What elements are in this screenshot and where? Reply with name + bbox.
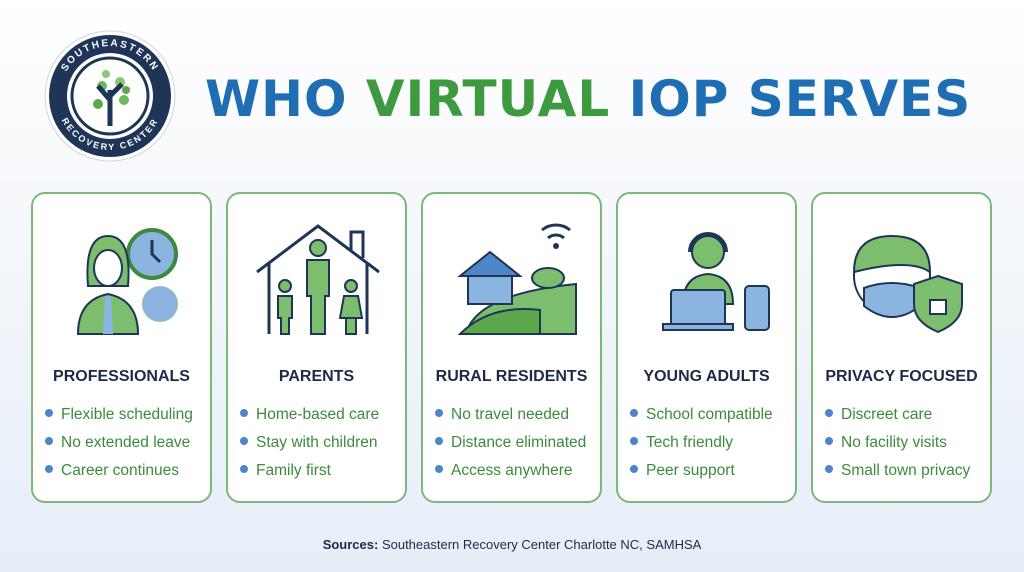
panel: parents [226, 192, 407, 503]
bullets [435, 406, 586, 479]
heading: PARENTS [279, 368, 354, 385]
bullets: Flexible scheduling [61, 406, 193, 423]
heading: PRIVACY FOCUSED [825, 368, 978, 385]
bullets: No facility visits [841, 434, 947, 451]
bullets: School compatible [646, 406, 773, 423]
bullets [825, 406, 970, 479]
bullets [45, 406, 193, 479]
panel: privacy [811, 192, 992, 503]
icon: professional [77, 228, 178, 335]
sources: Sources: Southeastern Recovery Center Charlotte NC, SAMHSA [323, 537, 701, 552]
panel: rural [421, 192, 602, 503]
bullets: Peer support [646, 462, 735, 479]
panel: young adults [616, 192, 797, 503]
bullets [240, 406, 379, 479]
heading: RURAL RESIDENTS [436, 368, 587, 385]
bullets: Access anywhere [451, 462, 572, 479]
bullets: Stay with children [256, 434, 377, 451]
panel: professionals [31, 192, 212, 503]
icon: rural house [457, 224, 577, 335]
icon: masked face shield [853, 235, 963, 334]
bullets: Small town privacy [841, 462, 970, 479]
title: WHO VIRTUAL IOP SERVES [205, 70, 971, 128]
bullets: Distance eliminated [451, 434, 586, 451]
bullets: No travel needed [451, 406, 569, 423]
heading: YOUNG ADULTS [643, 368, 770, 385]
bullets: Home-based care [256, 406, 379, 423]
bullets [630, 406, 773, 479]
bullets: Discreet care [841, 406, 932, 423]
bullets: Tech friendly [646, 434, 733, 451]
icon: family house [256, 224, 380, 335]
bullets: Family first [256, 462, 331, 479]
logo [44, 30, 176, 162]
bullets: Career continues [61, 462, 179, 479]
bullets: No extended leave [61, 434, 190, 451]
logo: SOUTHEASTERN [61, 39, 158, 71]
icon: young adult laptop [662, 232, 770, 331]
heading: PROFESSIONALS [53, 368, 190, 385]
logo: RECOVERY CENTER [62, 118, 158, 150]
